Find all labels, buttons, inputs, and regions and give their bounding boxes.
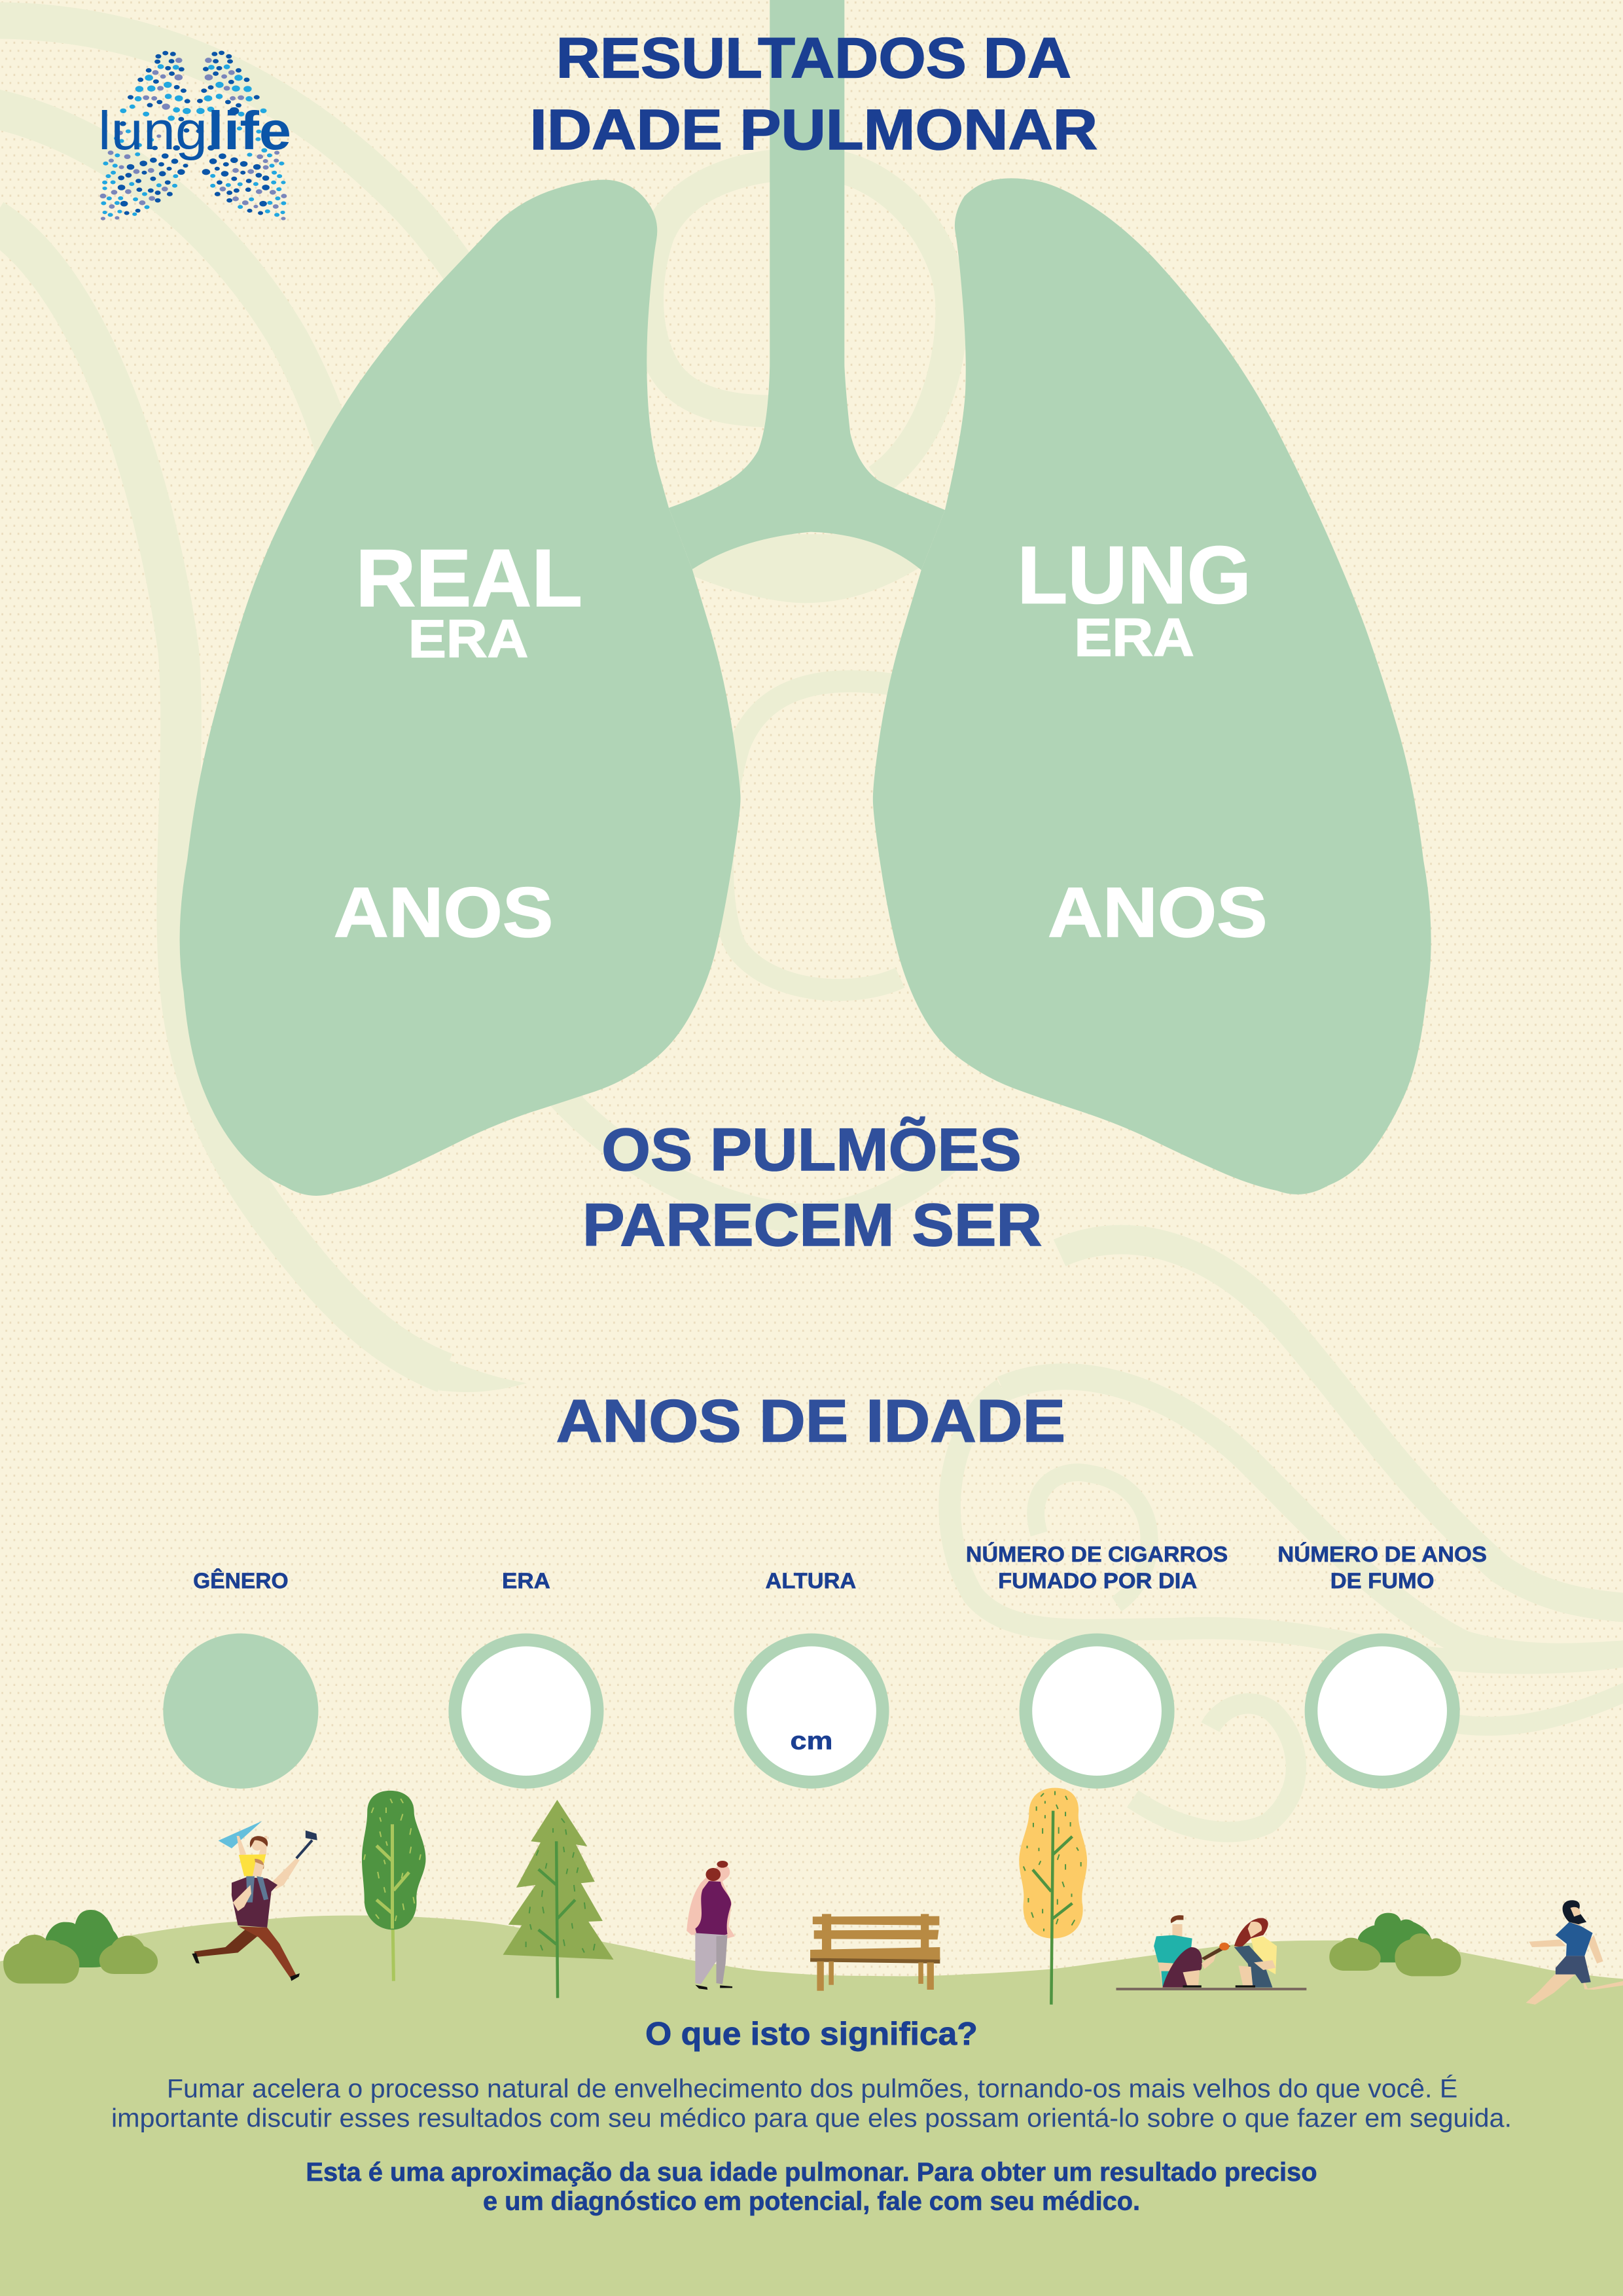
- right lung labels: LUNG: [1017, 530, 1251, 620]
- lungs illustration: [180, 0, 1431, 1196]
- logo wordmark: lung life: [98, 100, 291, 161]
- input labels: DE FUMO: [1330, 1569, 1435, 1593]
- title: RESULTADOS DA: [556, 27, 1071, 90]
- disclaimer: e um diagnóstico em potencial, fale com seu médico.: [483, 2187, 1140, 2216]
- swirl under bronchi: [688, 534, 919, 603]
- ground hill: [0, 1916, 1623, 2296]
- tree: yellow: [1019, 1788, 1087, 2005]
- left lung labels: [334, 533, 582, 952]
- couple with guitar: [1116, 1915, 1306, 1990]
- explanation heading: O que isto significa?: [645, 2016, 978, 2052]
- left lung labels: ANOS: [334, 873, 553, 952]
- explanation paragraph: importante discutir esses resultados com seu médico para que eles possam orientá-lo sobre o que fazer em seguida.: [111, 2103, 1512, 2132]
- right lung labels: ANOS: [1048, 873, 1268, 952]
- explanation paragraph: Fumar acelera o processo natural de envelhecimento dos pulmões, tornando-os mais velhos do que você. É: [167, 2074, 1457, 2104]
- runner: [1526, 1900, 1623, 2005]
- input labels: ERA: [502, 1569, 550, 1593]
- right lung labels: ERA: [1074, 608, 1194, 668]
- input labels: NÚMERO DE CIGARROS: [966, 1542, 1228, 1567]
- heading: anos de idade: ANOS DE IDADE: [556, 1388, 1065, 1455]
- disclaimer: Esta é uma aproximação da sua idade pulmonar. Para obter um resultado preciso: [306, 2157, 1317, 2187]
- left lung labels: ERA: [408, 609, 528, 669]
- heading: os pulmoes parecem ser: [582, 1117, 1042, 1259]
- park scene left: [3, 1791, 614, 1998]
- input labels: NÚMERO DE ANOS: [1277, 1542, 1487, 1567]
- disclaimer: [306, 2157, 1317, 2216]
- tree: green: [362, 1791, 426, 1981]
- input labels: GÊNERO: [193, 1568, 289, 1593]
- right lung: [873, 178, 1431, 1194]
- heading: os pulmoes parecem ser: PARECEM SER: [582, 1192, 1042, 1259]
- logo dots: [100, 51, 286, 220]
- input labels: [193, 1542, 1487, 1593]
- trachea and bronchi: [669, 0, 945, 570]
- swirl tail: [433, 1354, 527, 1392]
- bench: [810, 1914, 940, 1991]
- paper plane: [219, 1821, 262, 1848]
- left lung: [180, 180, 741, 1196]
- input labels: FUMADO POR DIA: [998, 1569, 1197, 1593]
- left lung labels: REAL: [355, 533, 582, 624]
- logo: lunglife: [98, 51, 291, 220]
- title: IDADE PULMONAR: [530, 98, 1097, 162]
- tree: pine: [503, 1800, 614, 1998]
- unit: cm: cm: [791, 1727, 832, 1755]
- explanation paragraph: [111, 2074, 1512, 2132]
- woman walking: [687, 1861, 735, 1990]
- man with child on shoulders: [192, 1821, 317, 1981]
- title: [530, 27, 1097, 162]
- right lung labels: [1017, 530, 1268, 952]
- input circles: [163, 1634, 1460, 1789]
- bush right: [1329, 1913, 1461, 1976]
- bush left: [3, 1910, 158, 1984]
- heading: os pulmoes parecem ser: OS PULMÕES: [601, 1117, 1022, 1183]
- park scene right: [687, 1788, 1461, 2005]
- input labels: ALTURA: [766, 1569, 856, 1593]
